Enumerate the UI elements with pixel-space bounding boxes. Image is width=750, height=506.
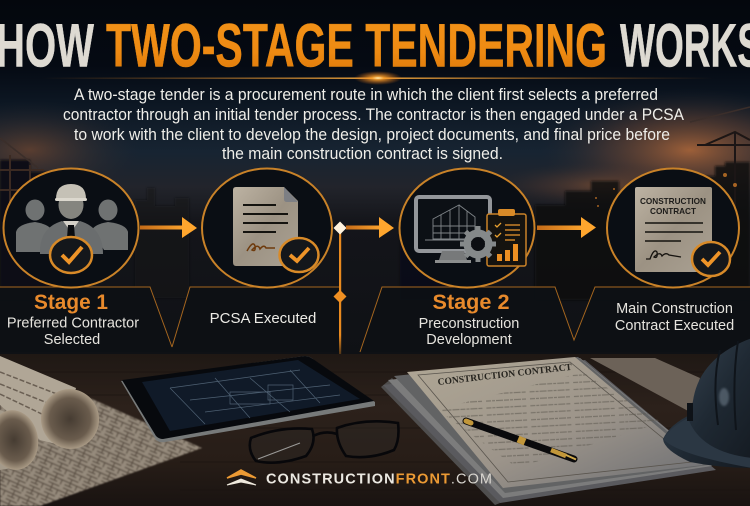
intro paragraph: A two-stage tender is a procurement route in which the client first selects a preferred	[74, 86, 658, 104]
clipboard checklist	[487, 209, 526, 266]
circle icon: preferred contractor team	[4, 168, 138, 288]
intro paragraph	[63, 86, 684, 163]
label: stage 1	[7, 291, 139, 348]
intro paragraph: the main construction contract is signed.	[222, 145, 503, 163]
label: stage 1: Preferred Contractor	[7, 316, 139, 332]
person right	[92, 200, 128, 250]
tablet with floor plan	[121, 356, 375, 442]
circle icon: PCSA document	[202, 168, 332, 288]
panel: label plates	[0, 287, 750, 352]
contract document: CONTRACT	[650, 207, 696, 216]
label: stage 2: Preconstruction	[419, 316, 519, 332]
monitor with building wireframe	[416, 197, 490, 263]
label: stage 2: Stage 2	[432, 291, 510, 314]
pen	[466, 421, 576, 460]
label: main contract	[615, 301, 734, 334]
label: stage 2: Development	[426, 332, 512, 348]
signed document	[233, 187, 298, 266]
label: main contract: Main Construction	[616, 301, 733, 317]
person left	[16, 200, 52, 252]
label: stage 1: Selected	[44, 332, 100, 348]
contract top sheet	[407, 357, 703, 488]
plate outlines	[0, 287, 750, 352]
hard hat	[663, 338, 750, 468]
contract top sheet: CONSTRUCTION CONTRACT	[437, 363, 573, 388]
icon: chevrons	[227, 470, 256, 485]
connector: vertical line with diamonds	[334, 222, 346, 362]
stage labels	[7, 291, 734, 348]
arrow: PCSA to stage 2	[346, 217, 394, 238]
check badge	[692, 242, 730, 276]
rolled blueprints	[0, 356, 106, 474]
gear	[460, 226, 496, 262]
contract document: CONSTRUCTION	[640, 197, 706, 206]
check badge	[50, 237, 92, 273]
intro paragraph: to work with the client to develop the design, project documents, and final price before	[74, 126, 670, 144]
title: HOW	[0, 12, 94, 80]
label: stage 2	[419, 291, 519, 348]
label: PCSA: PCSA Executed	[210, 310, 316, 327]
check badge	[280, 238, 318, 272]
arrow: stage 2 to contract	[537, 217, 596, 238]
stack of contract papers	[381, 357, 716, 505]
label: main contract: Contract Executed	[615, 318, 734, 334]
circle icon: main contract	[607, 168, 739, 288]
intro paragraph: contractor through an initial tender process. The contractor is then engaged under a PCSA	[63, 106, 684, 124]
blueprint sheet	[0, 358, 202, 506]
logo: constructionfront.com: CONSTRUCTIONFRONT.COM	[266, 472, 492, 488]
circle icon: preconstruction development	[400, 168, 534, 288]
title divider with glow	[40, 71, 716, 85]
wooden desk	[0, 354, 750, 506]
eyeglasses	[250, 421, 398, 463]
label: stage 1: Stage 1	[34, 291, 108, 314]
blueprint behind contract	[590, 358, 700, 412]
contract document	[635, 187, 712, 272]
engineer with hard hat	[40, 184, 103, 254]
arrow: stage 1 to PCSA	[140, 217, 197, 238]
